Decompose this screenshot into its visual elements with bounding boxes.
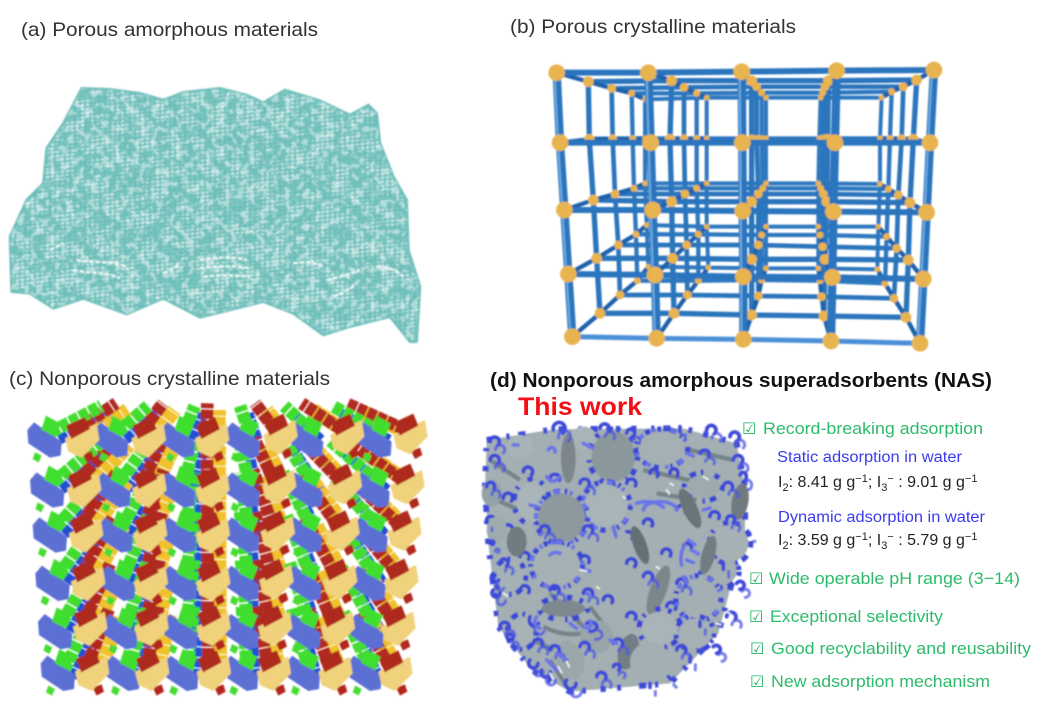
feature: record-breaking adsorption: ☑ (742, 419, 756, 438)
dynamic adsorption values: : 3.59 g g (789, 532, 855, 549)
heading a: (a) Porous amorphous materials (21, 19, 318, 41)
feature list (742, 419, 1032, 691)
panel d: nonporous amorphous superadsorbents (482, 370, 1032, 697)
static adsorption values (777, 449, 977, 494)
heading b: (b) Porous crystalline materials (510, 17, 796, 38)
static adsorption values: 3 (881, 482, 887, 494)
heading c: (c) Nonporous crystalline materials (9, 368, 330, 390)
static adsorption values: −1 (965, 473, 977, 485)
feature: recyclability: Good recyclability and reusability (771, 639, 1032, 658)
static adsorption values: : 8.41 g g (789, 474, 855, 491)
static adsorption values: 2 (782, 482, 789, 494)
static adsorption values: ; I (868, 474, 881, 491)
disordered disc-shaped molecules (482, 422, 755, 697)
feature: new mechanism: New adsorption mechanism (771, 672, 990, 691)
dynamic adsorption values: −1 (855, 531, 868, 543)
amorphous mesh surface (8, 86, 422, 344)
stacked molecular columns (27, 403, 428, 696)
static adsorption values: − (887, 473, 894, 485)
panel a: porous amorphous materials (0, 19, 433, 360)
cubic lattice framework (555, 70, 934, 343)
feature: new mechanism: ☑ (750, 672, 764, 691)
dynamic adsorption values: −1 (965, 531, 977, 543)
panel b: porous crystalline materials (510, 17, 934, 343)
feature: record-breaking adsorption: Record-breaking adsorption (763, 419, 983, 438)
dynamic adsorption values: I (778, 532, 782, 549)
dynamic adsorption values: : 5.79 g g (894, 532, 965, 549)
dynamic adsorption values: ; I (868, 532, 881, 549)
feature: pH range: Wide operable pH range (3−14) (769, 569, 1020, 588)
dynamic adsorption values (778, 509, 985, 552)
panel c: nonporous crystalline materials (9, 368, 428, 696)
this work label: This work (518, 393, 642, 421)
feature: selectivity: ☑ (749, 607, 763, 626)
dynamic adsorption values: Dynamic adsorption in water (778, 509, 985, 526)
static adsorption values: Static adsorption in water (777, 449, 962, 466)
static adsorption values: −1 (855, 473, 868, 485)
dynamic adsorption values: 2 (782, 540, 789, 552)
static adsorption values: : 9.01 g g (894, 474, 965, 491)
feature: selectivity: Exceptional selectivity (770, 607, 944, 626)
feature: pH range: ☑ (749, 569, 763, 588)
heading d: (d) Nonporous amorphous superadsorbents (NAS) (490, 370, 992, 392)
dynamic adsorption values: − (887, 531, 894, 543)
static adsorption values: I (778, 474, 782, 491)
feature: recyclability: ☑ (750, 639, 764, 658)
dynamic adsorption values: 3 (881, 540, 887, 552)
